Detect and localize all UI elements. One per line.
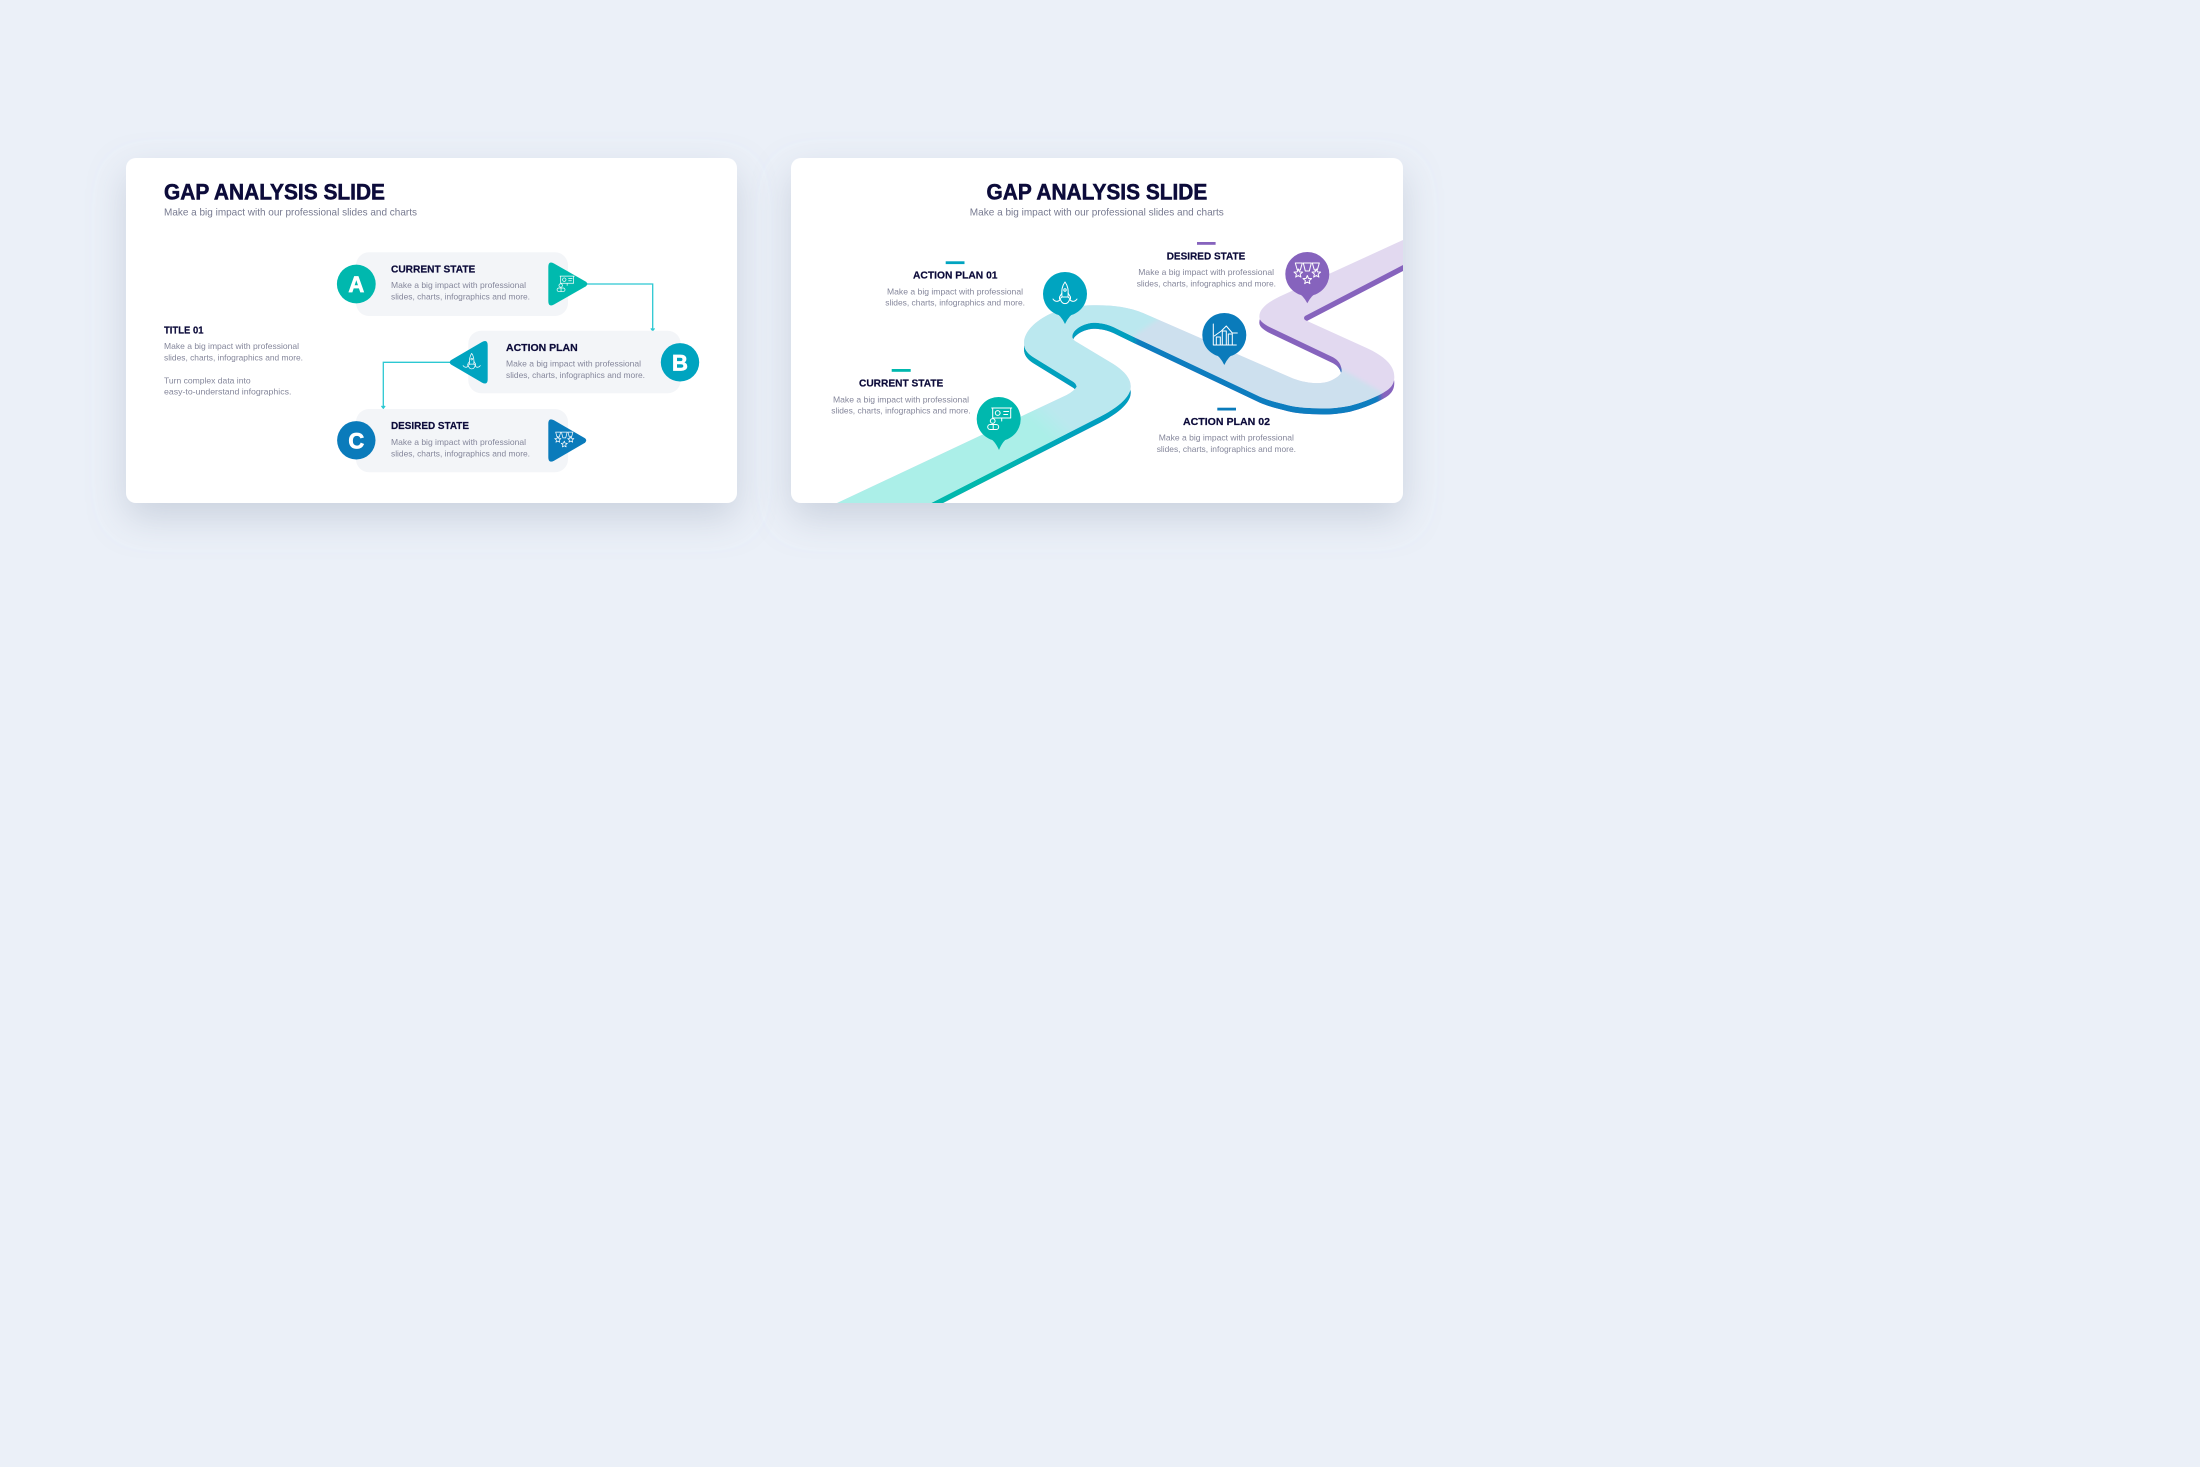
text block: title 01 xyxy=(164,325,303,397)
label: action plan 02: ACTION PLAN 02 xyxy=(1183,416,1270,428)
connector arrow: current state to action plan xyxy=(587,284,654,331)
badge C xyxy=(337,421,375,459)
text block: title 01: Make a big impact with professional xyxy=(164,341,299,351)
text block: title 01: easy-to-understand infographics. xyxy=(164,387,291,397)
label: action plan 01: ACTION PLAN 01 xyxy=(913,270,998,282)
label: desired state: Make a big impact with professional xyxy=(1138,267,1274,277)
description: slides, charts, infographics and more. xyxy=(391,292,530,302)
slide card xyxy=(126,158,737,503)
label: current state: Make a big impact with professional xyxy=(833,394,969,404)
icon: triangle with rocket xyxy=(450,341,488,384)
pin: action plan 01 xyxy=(1043,272,1087,324)
label: action plan 02: Make a big impact with professional xyxy=(1159,433,1294,443)
badge A: A xyxy=(348,272,364,297)
panel: roadmap slide xyxy=(790,158,1411,520)
description: Make a big impact with professional xyxy=(506,359,641,369)
slide card xyxy=(791,158,1403,503)
road top surface xyxy=(837,240,1403,503)
description: Make a big impact with professional xyxy=(391,437,526,447)
title: GAP ANALYSIS SLIDE xyxy=(986,179,1207,204)
badge B: B xyxy=(672,350,688,375)
pin: action plan 02 xyxy=(1202,313,1246,365)
label: current state xyxy=(831,369,971,416)
title: GAP ANALYSIS SLIDE xyxy=(164,179,385,204)
panel: process flow slide xyxy=(126,158,737,503)
label: current state: CURRENT STATE xyxy=(859,378,943,390)
row: current state xyxy=(337,252,587,316)
badge C: C xyxy=(348,428,364,453)
pin: desired state xyxy=(1285,252,1329,303)
subtitle: Make a big impact with our professional slides and charts xyxy=(164,206,417,218)
row: desired state xyxy=(337,409,586,472)
badge B xyxy=(661,343,699,381)
label: desired state xyxy=(1137,242,1276,288)
description: slides, charts, infographics and more. xyxy=(391,448,530,458)
description xyxy=(391,437,530,458)
description xyxy=(506,359,645,380)
label: current state: slides, charts, infographics and more. xyxy=(831,406,971,416)
badge A xyxy=(337,265,376,303)
label: action plan 01: Make a big impact with professional xyxy=(887,286,1023,296)
icon: triangle with medals xyxy=(548,419,586,462)
label: desired state: DESIRED STATE xyxy=(1167,250,1245,262)
label: desired state: slides, charts, infographics and more. xyxy=(1137,278,1276,288)
description: slides, charts, infographics and more. xyxy=(506,370,645,380)
road side wall xyxy=(932,265,1403,503)
label: action plan 01 xyxy=(885,261,1025,308)
label: action plan 01: slides, charts, infographics and more. xyxy=(885,298,1025,308)
text block: title 01: TITLE 01 xyxy=(164,325,204,337)
heading: current state: CURRENT STATE xyxy=(391,264,475,276)
winding road xyxy=(837,240,1403,503)
label: action plan 02: slides, charts, infographics and more. xyxy=(1157,444,1296,454)
icon: triangle with presentation board xyxy=(548,263,587,305)
description xyxy=(391,280,530,302)
text block: title 01: slides, charts, infographics and more. xyxy=(164,352,303,362)
row: action plan xyxy=(450,331,699,393)
pin: current state xyxy=(977,397,1021,450)
heading: desired state: DESIRED STATE xyxy=(391,420,469,432)
description: Make a big impact with professional xyxy=(391,280,526,290)
subtitle: Make a big impact with our professional slides and charts xyxy=(970,206,1224,218)
connector arrow: action plan to desired state xyxy=(382,362,450,408)
label: action plan 02 xyxy=(1157,408,1296,454)
heading: action plan: ACTION PLAN xyxy=(506,342,578,354)
text block: title 01: Turn complex data into xyxy=(164,375,251,385)
